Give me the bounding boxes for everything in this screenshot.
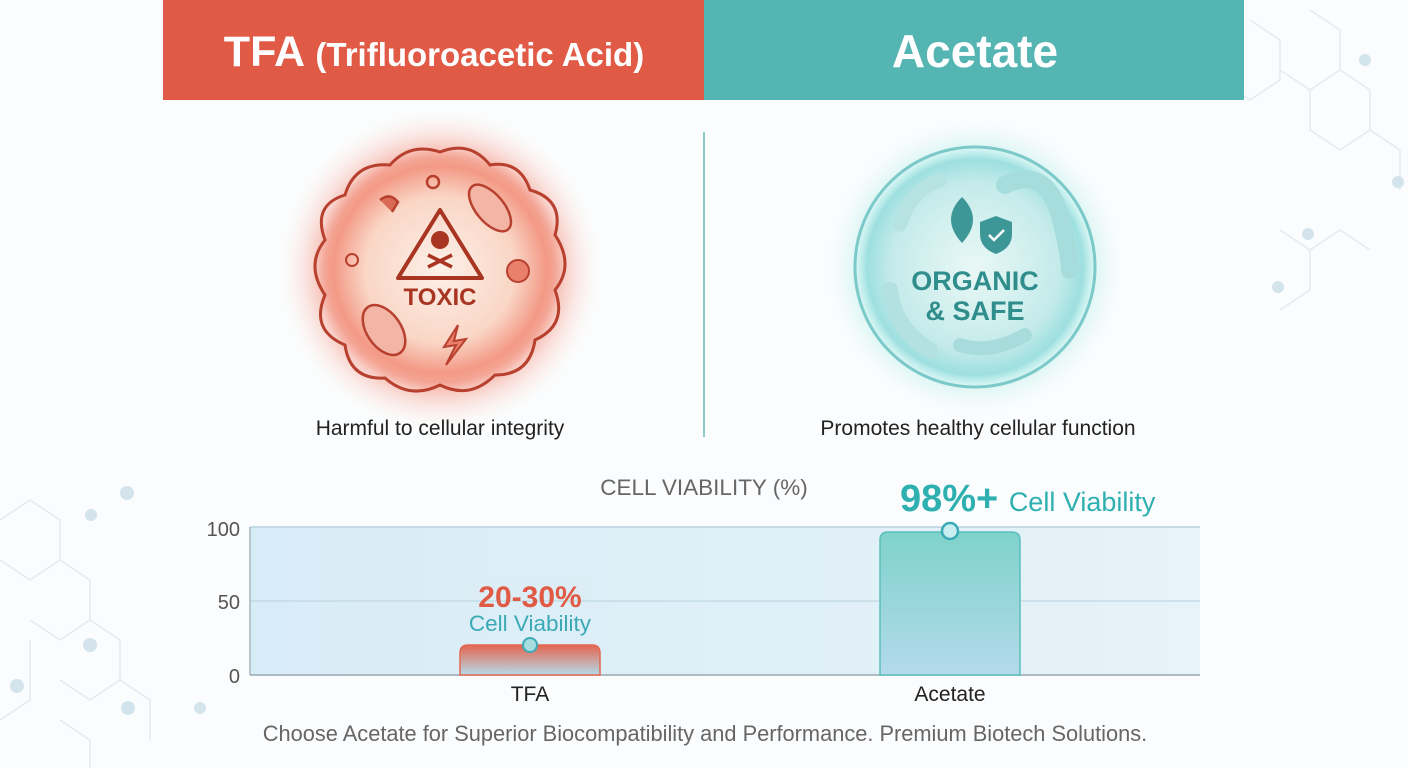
bar: TFA: Cell Viability <box>469 611 592 636</box>
bar chart: TFA <box>511 683 549 706</box>
icon: organic & safe sphere: ORGANIC <box>911 266 1039 296</box>
divider <box>703 132 705 437</box>
bar chart: 0 <box>229 666 240 688</box>
icon: toxic cell: TOXIC <box>404 284 476 311</box>
icon: organic & safe sphere <box>825 117 1125 417</box>
header: Acetate <box>704 0 1244 100</box>
caption: TFA: Harmful to cellular integrity <box>316 417 565 440</box>
bar: Acetate <box>880 478 1156 675</box>
bar: Acetate: 98%+ Cell Viability <box>900 478 1156 520</box>
header: TFA: TFA (Trifluoroacetic Acid) <box>224 28 644 76</box>
header: TFA <box>163 0 704 100</box>
caption: Acetate: Promotes healthy cellular function <box>820 417 1136 440</box>
footer tagline: Choose Acetate for Superior Biocompatibility and Performance. Premium Biotech Solutions. <box>263 721 1147 746</box>
bar: TFA <box>460 580 600 675</box>
bar chart: Acetate <box>914 683 986 706</box>
bar: TFA: 20-30% <box>478 581 582 614</box>
icon: toxic cell <box>280 110 600 430</box>
header: Acetate: Acetate <box>892 25 1058 77</box>
icon: organic & safe sphere: & SAFE <box>925 296 1025 326</box>
bar chart: 100 <box>207 519 240 541</box>
chart title: CELL VIABILITY (%) <box>600 475 808 500</box>
bar chart <box>207 478 1200 706</box>
bar chart: 50 <box>218 592 240 614</box>
